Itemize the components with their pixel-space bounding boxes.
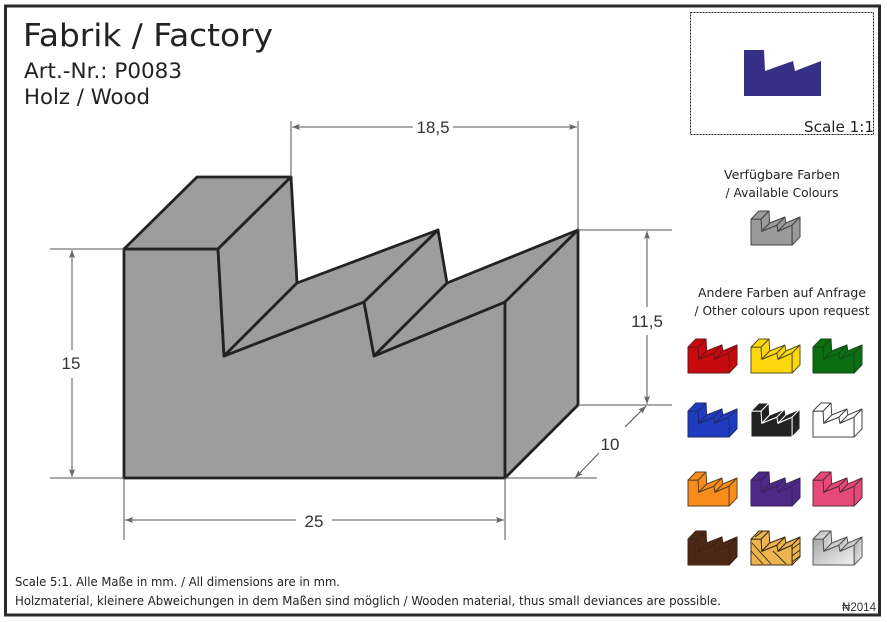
dimension: width 25 [124,478,505,540]
other colours heading: Andere Farben auf Anfrage [698,286,866,300]
icon: red factory [688,339,737,373]
footnote: Scale 5:1. Alle Maße in mm. / All dimensions are in mm. [15,575,340,589]
scale label: Scale 1:1 [804,118,874,136]
material: Holz / Wood [24,85,150,109]
dimension: height 15: 15 [62,354,80,373]
dimension: height 11,5: 11,5 [631,312,663,331]
dimension: height 15 [50,249,124,478]
other colours heading [694,286,870,318]
available colours heading: Verfügbare Farben [724,168,840,182]
footnote [15,575,721,608]
dimension: depth 10 [505,406,646,478]
title: Fabrik / Factory [23,18,273,54]
icon: blue factory [688,403,737,437]
dimension: height 11,5 [578,230,672,405]
icon: silver factory [813,531,862,565]
other colours heading: / Other colours upon request [694,304,870,318]
icon: green factory [813,339,862,373]
icon: brown factory [688,531,737,565]
main factory drawing [124,177,578,478]
available colours heading [724,168,840,200]
footnote: Holzmaterial, kleinere Abweichungen in dem Maßen sind möglich / Wooden material, thus small deviances are possible. [15,594,721,608]
icon: yellow factory [751,339,800,373]
available colours heading: / Available Colours [726,186,838,200]
icon: purple factory [751,472,800,506]
article number: Art.-Nr.: P0083 [24,59,182,83]
dimension: width 18,5: 18,5 [416,118,450,137]
dimension: width 25: 25 [305,512,323,531]
dimension: depth 10: 10 [601,435,619,454]
copyright year: ₦2014 [842,602,877,614]
scale 1:1 panel [690,12,874,136]
silhouette at actual size [744,50,821,96]
icon: black factory [751,403,800,437]
icon: pink factory [813,472,862,506]
dimension: width 18,5 [291,118,578,230]
icon: orange factory [688,472,737,506]
icon: grey factory [751,211,800,245]
icon: wood factory [751,531,800,565]
icon: white factory [813,403,862,437]
